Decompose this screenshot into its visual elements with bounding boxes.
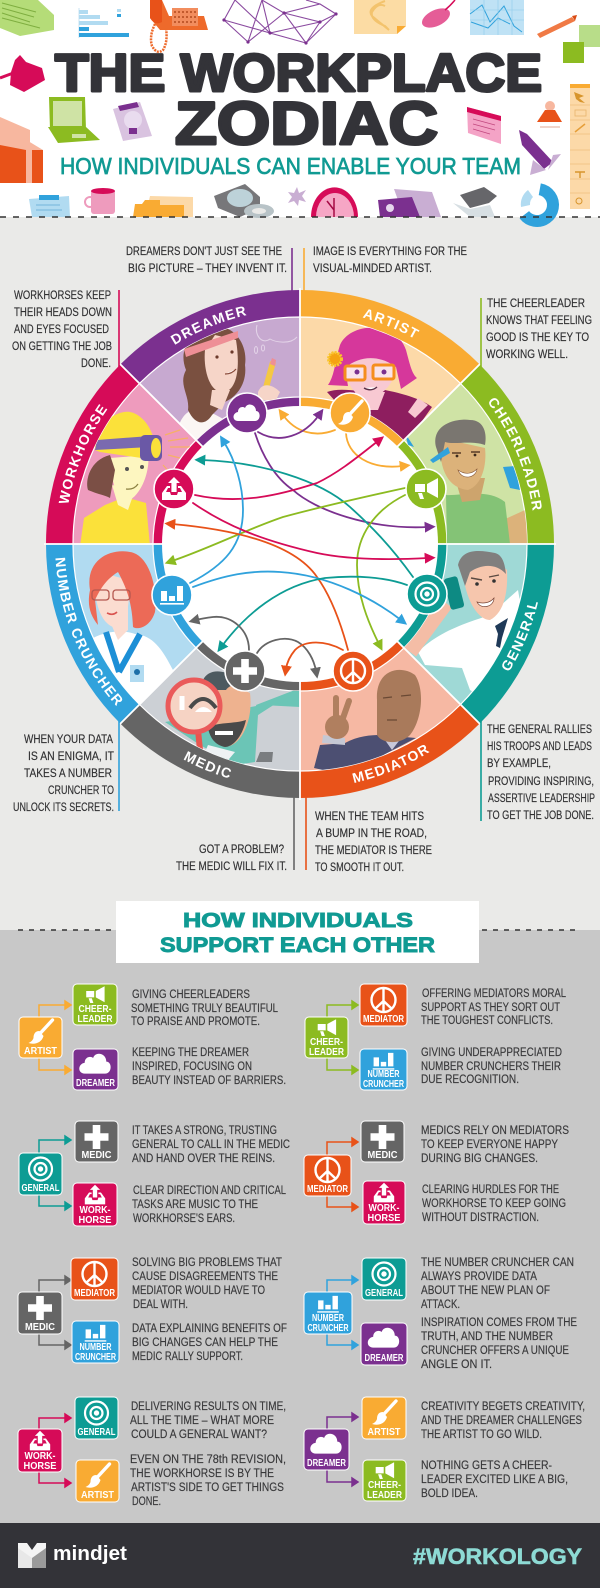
- box: number cruncher source: [304, 1292, 352, 1334]
- box: general target: GENERAL: [365, 1288, 403, 1299]
- box: dreamer source: DREAMER: [307, 1458, 347, 1469]
- arrow: medic to number cruncher: [196, 617, 249, 650]
- box: artist: [19, 1017, 62, 1058]
- box: mediator target: MEDIATOR: [363, 1014, 405, 1025]
- text: artist to dreamer: BEAUTY INSTEAD OF BARRIERS.: [132, 1075, 286, 1087]
- callout: artist: VISUAL-MINDED ARTIST.: [313, 263, 432, 275]
- box: cheerleader: CHEER-: [78, 1004, 112, 1015]
- icon: blue donut chart: [518, 186, 556, 224]
- icon: stapler: [453, 187, 497, 217]
- text: workhorse to general: DELIVERING RESULTS ON TIME,: [131, 1401, 286, 1413]
- text: workhorse to general: COULD A GENERAL WANT?: [131, 1429, 267, 1441]
- segment: mediator: [300, 642, 479, 798]
- portrait: cheerleader: [405, 420, 530, 544]
- arrow: number cruncher to dreamer: [190, 442, 243, 583]
- text: number cruncher to dreamer: CRUNCHER OFFERS A UNIQUE: [421, 1345, 569, 1357]
- portrait: mediator: [314, 670, 421, 775]
- background: lower support section: [0, 930, 600, 1523]
- text: general to workhorse: WORKHORSE'S EARS.: [133, 1213, 235, 1225]
- box: number cruncher target: CRUNCHER: [363, 1079, 405, 1090]
- callout: workhorse: [12, 290, 119, 370]
- icon: medic badge: [225, 651, 265, 691]
- text: dreamer to artist: [421, 1401, 585, 1441]
- portrait: medic: [165, 671, 300, 765]
- text: cheerleader to number cruncher: NUMBER CRUNCHERS THEIR: [421, 1061, 561, 1073]
- box: workhorse source: HORSE: [24, 1461, 57, 1472]
- box: cheerleader: LEADER: [78, 1014, 113, 1025]
- text: general to workhorse: CLEAR DIRECTION AND CRITICAL: [133, 1185, 286, 1197]
- logo wordmark: mindjet: [53, 1543, 127, 1565]
- box: workhorse: WORK-: [80, 1205, 110, 1216]
- group: cheerleader supports: [305, 984, 566, 1090]
- segment: medic: [121, 642, 300, 798]
- callout: cheerleader: WORKING WELL.: [486, 349, 568, 361]
- box: artist target: [362, 1397, 406, 1439]
- panel: zodiac wheel: [44, 288, 556, 800]
- callout: mediator: TO SMOOTH IT OUT.: [315, 862, 404, 874]
- label: workhorse: WORKHORSE: [58, 404, 108, 503]
- callout: workhorse: AND EYES FOCUSED: [14, 324, 109, 336]
- icon: blue line chart: [470, 0, 524, 35]
- arrow: workhorse to artist: [195, 441, 378, 499]
- icon: little man: [537, 101, 562, 127]
- text: number cruncher to general: [421, 1257, 574, 1311]
- box: cheerleader source: CHEER-: [310, 1037, 343, 1048]
- text: workhorse to general: ALL THE TIME – WHAT MORE: [130, 1415, 274, 1427]
- segment: workhorse: [46, 365, 202, 544]
- box: cheerleader source: LEADER: [309, 1047, 345, 1058]
- text: general to medic: IT TAKES A STRONG, TRUSTING: [132, 1125, 277, 1137]
- text: cheerleader to number cruncher: DUE RECOGNITION.: [421, 1074, 519, 1086]
- box: general: [19, 1153, 62, 1195]
- box: workhorse: [73, 1183, 117, 1226]
- text: medic to mediator: [132, 1257, 282, 1311]
- group: artist supports: [19, 984, 286, 1090]
- icon: orange folder holder: [0, 117, 43, 183]
- box: mediator source: MEDIATOR: [307, 1184, 349, 1195]
- wheel interior: white circle: [162, 406, 438, 682]
- callout: mediator: [306, 797, 432, 874]
- icon: pencil rocket: [519, 130, 561, 175]
- portrait: general: [410, 551, 524, 700]
- box: cheerleader target: [363, 1460, 406, 1501]
- icon: green paper stack: [0, 0, 54, 36]
- text: medic to number cruncher: MEDIC RALLY SUPPORT.: [132, 1351, 243, 1363]
- label: cheerleader: CHEERLEADER: [489, 398, 542, 511]
- heading line 1: HOW INDIVIDUALS: [183, 910, 413, 932]
- connector arrows: [39, 1276, 71, 1349]
- icon: mediator badge: [333, 651, 373, 691]
- arrow: general to medic: [222, 577, 407, 646]
- text: workhorse to artist: [130, 1454, 286, 1508]
- text: general to workhorse: TASKS ARE MUSIC TO THE: [132, 1199, 258, 1211]
- box: medic target: MEDIC: [368, 1150, 398, 1161]
- text: mediator to medic: TO KEEP EVERYONE HAPPY: [421, 1139, 558, 1151]
- background: wheel section: [0, 217, 600, 930]
- subtitle: HOW INDIVIDUALS CAN ENABLE YOUR TEAM: [60, 153, 521, 179]
- text: dreamer to artist: THE ARTIST TO GO WILD.: [421, 1429, 542, 1441]
- box: artist target: ARTIST: [81, 1490, 114, 1501]
- box: mediator: [71, 1258, 118, 1300]
- text: dreamer to cheerleader: BOLD IDEA.: [421, 1488, 478, 1500]
- box: number cruncher target: NUMBER: [368, 1069, 400, 1080]
- text: number cruncher to dreamer: TRUTH, AND THE NUMBER: [421, 1331, 553, 1343]
- text: general to medic: [132, 1125, 290, 1165]
- callout: dreamer: DREAMERS DON'T JUST SEE THE: [126, 246, 282, 258]
- icon: pink mouse: [419, 0, 455, 32]
- connector arrows: [327, 1276, 358, 1349]
- callout: workhorse: WORKHORSES KEEP: [14, 290, 111, 302]
- arrow: mediator to medic: [286, 642, 343, 669]
- icon: general badge: [407, 574, 447, 614]
- callout: general: [481, 720, 595, 822]
- text: cheerleader to mediator: [421, 988, 566, 1027]
- text: medic to mediator: MEDIATOR WOULD HAVE TO: [132, 1285, 265, 1297]
- box: medic: MEDIC: [82, 1150, 112, 1161]
- text: mediator to medic: MEDICS RELY ON MEDIATORS: [421, 1125, 569, 1137]
- box: workhorse: HORSE: [78, 1215, 112, 1226]
- arrow: cheerleader to mediator: [357, 495, 405, 644]
- callout: medic: [176, 797, 294, 873]
- box: medic source: MEDIC: [25, 1322, 55, 1333]
- icon: orange desk phone: [150, 0, 208, 52]
- portrait: artist: [327, 328, 432, 445]
- text: number cruncher to general: ATTACK.: [421, 1299, 460, 1311]
- callout: general: BY EXAMPLE,: [487, 758, 551, 770]
- segment: number cruncher: [46, 544, 202, 723]
- arrow: dreamer to cheerleader: [255, 433, 428, 527]
- text: mediator to workhorse: WITHOUT DISTRACTION.: [422, 1212, 539, 1224]
- label: number cruncher: NUMBER CRUNCHER: [55, 558, 122, 706]
- label: dreamer: DREAMER: [170, 306, 246, 345]
- box: dreamer target: DREAMER: [364, 1353, 404, 1364]
- text: workhorse to artist: THE WORKHORSE IS BY THE: [130, 1468, 274, 1480]
- icon: purple network: [222, 0, 338, 45]
- text: cheerleader to mediator: OFFERING MEDIATORS MORAL: [422, 988, 566, 1000]
- text: general to workhorse: [132, 1185, 286, 1225]
- icon: number cruncher badge: [152, 575, 192, 615]
- icon: pink desk lamp: [0, 55, 45, 92]
- group: medic supports: [18, 1257, 287, 1363]
- text: workhorse to artist: DONE.: [132, 1496, 161, 1508]
- icon: green laptop: [48, 97, 100, 143]
- text: cheerleader to mediator: SUPPORT AS THEY SORT OUT: [421, 1002, 560, 1014]
- box: dreamer source: [304, 1429, 349, 1470]
- arrow: artist to cheerleader: [346, 433, 403, 467]
- group: workhorse supports: [18, 1397, 286, 1508]
- box: general target: [75, 1397, 118, 1439]
- portrait: dreamer: [178, 325, 297, 445]
- box: artist: ARTIST: [24, 1046, 57, 1057]
- arrows between roles: [172, 415, 428, 671]
- group: number cruncher supports: [304, 1257, 577, 1371]
- callout: number cruncher: UNLOCK ITS SECRETS.: [13, 802, 114, 814]
- group: dreamer supports: [304, 1397, 585, 1501]
- title line 1: THE WORKPLACE: [55, 44, 542, 103]
- text: artist to dreamer: [132, 1047, 286, 1087]
- box: dreamer target: [361, 1323, 407, 1365]
- label: general: GENERAL: [502, 602, 538, 670]
- box: artist target: ARTIST: [368, 1427, 400, 1438]
- callout: number cruncher: CRUNCHER TO: [48, 785, 114, 797]
- icon: pink cup: [85, 188, 115, 214]
- footer hashtag: #WORKOLOGY: [413, 1544, 582, 1569]
- portrait: workhorse: [80, 412, 190, 546]
- connector arrows: [327, 1001, 358, 1074]
- box: mediator target: [360, 984, 407, 1026]
- icon: mindjet mark: [18, 1543, 46, 1568]
- box: workhorse source: [18, 1429, 62, 1472]
- arrow: workhorse to general: [193, 503, 428, 559]
- arrow: dreamer to artist: [258, 415, 319, 438]
- callout: mediator: THE MEDIATOR IS THERE: [315, 845, 432, 857]
- box: mediator source: [304, 1155, 351, 1196]
- callout: workhorse: ON GETTING THE JOB: [12, 341, 112, 353]
- text: medic to number cruncher: DATA EXPLAINING BENEFITS OF: [132, 1323, 287, 1335]
- box: mediator: MEDIATOR: [74, 1288, 116, 1299]
- callout: artist: [304, 246, 467, 291]
- icon: yellow tool palette: [570, 84, 590, 209]
- arrow: cheerleader to number cruncher: [172, 488, 405, 561]
- section heading box: [116, 901, 479, 963]
- box: medic: [75, 1121, 118, 1162]
- text: number cruncher to dreamer: ANGLE ON IT.: [421, 1359, 492, 1371]
- box: medic source: [18, 1292, 62, 1334]
- text: cheerleader to number cruncher: [421, 1047, 562, 1086]
- box: dreamer: [73, 1049, 118, 1090]
- background: white header band: [0, 0, 600, 217]
- arrow: number cruncher to general: [193, 572, 401, 620]
- callout: dreamer: [126, 246, 292, 291]
- text: medic to mediator: DEAL WITH.: [133, 1299, 188, 1311]
- label: medic: MEDIC: [184, 751, 231, 778]
- icon: artist badge: [330, 393, 370, 433]
- icon: yellow folders: [133, 196, 193, 217]
- callout: mediator: A BUMP IN THE ROAD,: [316, 828, 427, 840]
- footer logo: mindjet: [18, 1543, 127, 1568]
- text: dreamer to cheerleader: NOTHING GETS A CHEER-: [421, 1460, 552, 1472]
- callout: cheerleader: [481, 298, 592, 367]
- text: medic to number cruncher: BIG CHANGES CAN HELP THE: [132, 1337, 278, 1349]
- segment: general: [398, 543, 554, 723]
- text: number cruncher to dreamer: INSPIRATION COMES FROM THE: [421, 1317, 577, 1329]
- segment: artist: [300, 290, 479, 446]
- text: medic to mediator: CAUSE DISAGREEMENTS THE: [132, 1271, 278, 1283]
- box: number cruncher target: [360, 1049, 407, 1090]
- box: medic target: [361, 1121, 404, 1162]
- text: mediator to medic: [421, 1125, 569, 1165]
- header doodles: office objects: [0, 0, 600, 224]
- text: mediator to workhorse: WORKHORSE TO KEEP GOING: [422, 1198, 566, 1210]
- box: general: GENERAL: [22, 1183, 60, 1194]
- box: dreamer: DREAMER: [76, 1078, 116, 1089]
- connector arrows: [39, 1414, 71, 1487]
- icon: pink clock: [311, 187, 358, 217]
- icon: dreamer badge: [227, 393, 267, 433]
- title line 2: ZODIAC: [175, 90, 438, 157]
- segment: cheerleader: [398, 365, 554, 544]
- connector arrows: [39, 1136, 71, 1210]
- text: artist to cheerleader: TO PRAISE AND PROMOTE.: [131, 1016, 260, 1028]
- callout: dreamer: BIG PICTURE – THEY INVENT IT.: [128, 263, 287, 275]
- title: The Workplace Zodiac: [55, 44, 542, 157]
- icon: purple documents: [378, 189, 441, 217]
- box: number cruncher: [72, 1321, 119, 1363]
- box: number cruncher source: NUMBER: [312, 1313, 345, 1324]
- arrow: medic to mediator: [257, 639, 316, 671]
- callout: workhorse: DONE.: [81, 358, 111, 370]
- box: cheerleader target: LEADER: [367, 1490, 403, 1501]
- callout: artist: IMAGE IS EVERYTHING FOR THE: [313, 246, 467, 258]
- text: number cruncher to general: THE NUMBER CRUNCHER CAN: [421, 1257, 574, 1269]
- connector arrows: [39, 1001, 71, 1074]
- text: cheerleader to number cruncher: GIVING UNDERAPPRECIATED: [421, 1047, 562, 1059]
- text: artist to cheerleader: GIVING CHEERLEADERS: [132, 989, 250, 1001]
- text: artist to dreamer: INSPIRED, FOCUSING ON: [132, 1061, 252, 1073]
- callout: workhorse: THEIR HEADS DOWN: [14, 307, 112, 319]
- callout: cheerleader: THE CHEERLEADER: [487, 298, 585, 310]
- text: general to medic: AND HAND OVER THE REINS.: [132, 1153, 275, 1165]
- arrow: artist to dreamer: [283, 415, 335, 434]
- portrait: number cruncher: [89, 551, 173, 710]
- icon: cheerleader badge: [406, 469, 446, 509]
- text: artist to cheerleader: [131, 989, 278, 1028]
- text: cheerleader to mediator: THE TOUGHEST CONFLICTS.: [421, 1015, 553, 1027]
- icon: crayon: [537, 15, 577, 38]
- icon: ampersand note: [354, 0, 406, 34]
- icon: bar chart: [79, 8, 129, 38]
- callout: number cruncher: WHEN YOUR DATA: [24, 734, 113, 746]
- box: cheerleader: [73, 984, 117, 1025]
- icon: workhorse badge: [154, 469, 194, 509]
- text: mediator to medic: DURING BIG CHANGES.: [421, 1153, 538, 1165]
- connector arrows: [327, 1138, 358, 1211]
- box: general target: GENERAL: [78, 1427, 116, 1438]
- text: artist to cheerleader: SOMETHING TRULY BEAUTIFUL: [131, 1003, 278, 1015]
- callout: medic: THE MEDIC WILL FIX IT.: [176, 861, 287, 873]
- callout: number cruncher: IS AN ENIGMA, IT: [28, 751, 114, 763]
- text: workhorse to general: [130, 1401, 286, 1441]
- box: number cruncher: NUMBER: [80, 1342, 112, 1353]
- box: workhorse source: WORK-: [24, 1451, 56, 1462]
- box: number cruncher source: CRUNCHER: [308, 1323, 349, 1334]
- text: artist to dreamer: KEEPING THE DREAMER: [132, 1047, 249, 1059]
- icon: lightbulb poster: [113, 102, 152, 141]
- text: mediator to workhorse: CLEARING HURDLES FOR THE: [422, 1184, 559, 1196]
- text: workhorse to artist: ARTIST'S SIDE TO GET THINGS: [131, 1482, 284, 1494]
- text: number cruncher to general: ALWAYS PROVIDE DATA: [421, 1271, 537, 1283]
- text: medic to number cruncher: [132, 1323, 287, 1363]
- label: mediator: MEDIATOR: [352, 745, 430, 783]
- box: workhorse target: WORK-: [368, 1203, 400, 1214]
- segment: dreamer: [121, 290, 300, 446]
- text: dreamer to cheerleader: LEADER EXCITED LIKE A BIG,: [421, 1474, 568, 1486]
- group: general supports: [19, 1121, 290, 1226]
- box: workhorse target: [363, 1181, 405, 1224]
- background: footer: [0, 1523, 600, 1588]
- callout: number cruncher: [13, 720, 119, 814]
- box: workhorse target: HORSE: [368, 1213, 401, 1224]
- box: cheerleader target: CHEER-: [368, 1480, 401, 1491]
- connector arrows: [327, 1413, 358, 1486]
- arrow: general to workhorse: [202, 460, 413, 577]
- icon: tape dispenser: [214, 184, 274, 218]
- box: number cruncher: CRUNCHER: [75, 1352, 117, 1363]
- icon: pink window: [467, 107, 501, 144]
- heading line 2: SUPPORT EACH OTHER: [160, 934, 435, 957]
- text: number cruncher to dreamer: [421, 1317, 577, 1371]
- text: general to medic: GENERAL TO CALL IN THE MEDIC: [132, 1139, 290, 1151]
- box: artist target: [76, 1460, 119, 1502]
- text: workhorse to artist: EVEN ON THE 78th REVISION,: [130, 1454, 286, 1466]
- text: dreamer to cheerleader: [421, 1460, 568, 1500]
- text: mediator to workhorse: [422, 1184, 566, 1224]
- icon: purple star: [288, 187, 306, 206]
- icon: blue clipboard: [29, 195, 70, 217]
- icon: green sticky notes: [563, 25, 600, 63]
- callout: medic: GOT A PROBLEM?: [199, 844, 284, 856]
- callout: number cruncher: TAKES A NUMBER: [24, 768, 112, 780]
- box: cheerleader source: [305, 1017, 348, 1058]
- text: number cruncher to general: ABOUT THE NEW PLAN OF: [421, 1285, 550, 1297]
- arrow: mediator to workhorse: [172, 524, 348, 650]
- text: medic to mediator: SOLVING BIG PROBLEMS THAT: [132, 1257, 282, 1269]
- group: mediator supports: [304, 1121, 569, 1224]
- label: artist: ARTIST: [362, 309, 420, 338]
- callout: mediator: WHEN THE TEAM HITS: [315, 811, 424, 823]
- box: general target: [362, 1258, 406, 1300]
